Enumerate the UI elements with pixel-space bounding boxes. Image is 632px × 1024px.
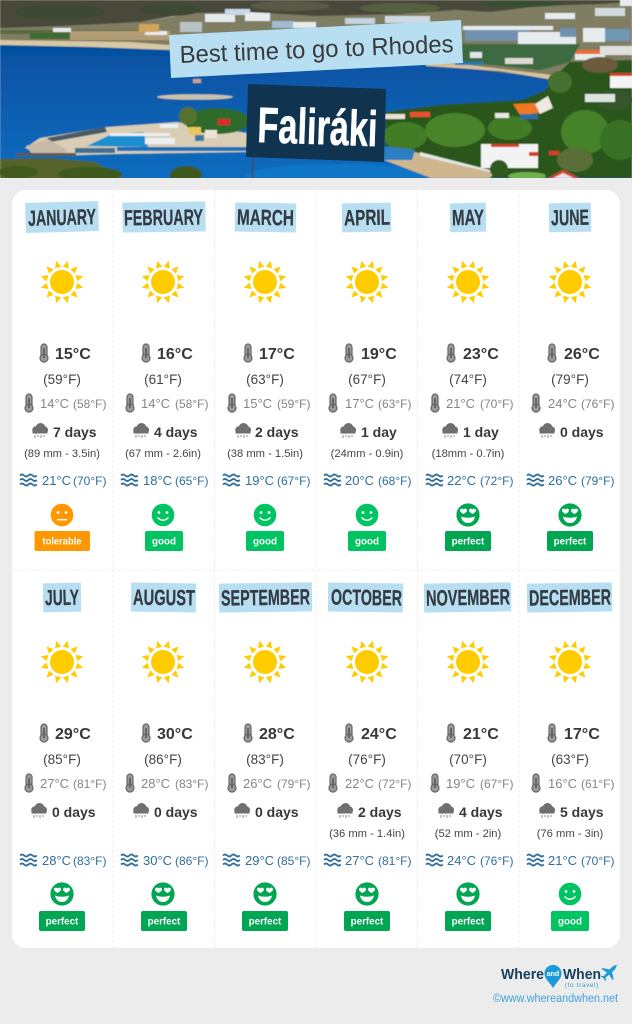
sea temperature: (72°F) (480, 474, 513, 488)
icon: sun (446, 640, 490, 684)
hillside (0, 0, 632, 28)
felt temperature (25, 394, 106, 412)
felt temperature: 14°C (141, 396, 170, 411)
rating label: perfect (249, 916, 282, 928)
rating label (551, 911, 589, 931)
felt temperature (228, 394, 310, 412)
rating label (445, 531, 491, 551)
felt temperature: 27°C (40, 776, 69, 791)
month: February (121, 201, 208, 551)
rating label: perfect (351, 916, 384, 928)
rainy days (442, 423, 499, 440)
temperature (142, 344, 193, 363)
sea temperature: 18°C (143, 473, 172, 488)
temperature (345, 724, 397, 743)
month title (131, 583, 196, 612)
temperature fahrenheit: (61°F) (144, 372, 182, 387)
temperature: 17°C (564, 726, 600, 743)
logo: Where and When: (to travel) (565, 983, 599, 989)
icon: sun (345, 260, 389, 304)
white beach building (481, 144, 538, 168)
sea temperature: (86°F) (175, 854, 208, 868)
felt temperature: 14°C (40, 396, 69, 411)
sea temperature (324, 473, 411, 488)
month title (43, 583, 81, 612)
rating label: perfect (452, 916, 485, 928)
sea temperature (426, 473, 513, 488)
sea temperature: 27°C (345, 853, 374, 868)
temperature (345, 344, 397, 363)
rating label: good (152, 536, 176, 548)
month title (122, 201, 206, 233)
panel: monthly calendar (12, 190, 620, 948)
sea temperature (20, 853, 106, 868)
rating label (547, 531, 593, 551)
month title: APRIL (344, 205, 390, 230)
felt temperature: (61°F) (581, 777, 614, 791)
temperature (40, 344, 91, 363)
temperature (244, 344, 295, 363)
felt temperature (431, 774, 513, 792)
sea temperature: 21°C (548, 853, 577, 868)
temperature (40, 724, 91, 743)
rating label (344, 911, 390, 931)
temperature fahrenheit: (63°F) (246, 372, 284, 387)
felt temperature (126, 394, 208, 412)
month title: MAY (452, 205, 484, 230)
sea temperature: 21°C (42, 473, 71, 488)
rating label: good (558, 916, 582, 928)
icon: sun (548, 260, 592, 304)
month: May (426, 203, 513, 551)
rating label (141, 911, 187, 931)
rainy days (133, 803, 198, 820)
lower beach (384, 152, 495, 178)
sea temperature: 22°C (447, 473, 476, 488)
felt temperature: (70°F) (480, 397, 513, 411)
rating label: perfect (554, 536, 587, 548)
felt temperature: (58°F) (73, 397, 106, 411)
temperature (548, 344, 600, 363)
sea temperature (121, 473, 208, 488)
temperature: 23°C (463, 346, 499, 363)
rainy days (337, 803, 402, 820)
rainfall: (18mm - 0.7in) (432, 448, 505, 460)
rainy days: 4 days (154, 424, 198, 440)
felt temperature: 26°C (243, 776, 272, 791)
rainfall: (38 mm - 1.5in) (227, 448, 303, 460)
rating label (145, 531, 183, 551)
month title: MARCH (237, 205, 294, 231)
sea temperature (324, 853, 411, 868)
left beach (0, 40, 170, 50)
rainy days: 5 days (560, 804, 604, 820)
rating label (34, 531, 90, 551)
rainy days: 4 days (459, 804, 503, 820)
month title: AUGUST (133, 585, 196, 610)
felt temperature: 21°C (446, 396, 475, 411)
harbour greenery (184, 108, 250, 134)
rainfall: (36 mm - 1.4in) (329, 828, 405, 840)
temperature (142, 724, 193, 743)
month title (25, 201, 99, 233)
rating face (456, 503, 480, 527)
header photo of Faliraki bay (0, 0, 632, 188)
rainy days: 2 days (358, 804, 402, 820)
sea temperature: 19°C (245, 473, 274, 488)
rainy days (31, 803, 96, 820)
icon: plane (601, 964, 618, 981)
icon: sun (40, 260, 84, 304)
rating face (355, 882, 379, 906)
sea temperature: 20°C (345, 473, 374, 488)
felt temperature: 28°C (141, 776, 170, 791)
temperature: 30°C (157, 726, 193, 743)
felt temperature: (59°F) (277, 397, 310, 411)
felt temperature: 19°C (446, 776, 475, 791)
rainy days (438, 803, 503, 820)
rating label: perfect (452, 536, 485, 548)
temperature (447, 724, 499, 743)
temperature: 21°C (463, 726, 499, 743)
sea temperature: (67°F) (277, 474, 310, 488)
small boat (193, 79, 201, 83)
banner: Best time to go to Rhodes (169, 20, 463, 78)
rating face (356, 504, 378, 526)
rainy days (32, 423, 97, 440)
month: June (527, 203, 614, 551)
rating label (445, 911, 491, 931)
felt temperature: (63°F) (378, 397, 411, 411)
sea temperature: 26°C (548, 473, 577, 488)
felt temperature: 16°C (548, 776, 577, 791)
temperature: 15°C (55, 346, 91, 363)
sea temperature: (70°F) (73, 474, 106, 488)
left tan fields (70, 31, 170, 40)
rating face (50, 882, 74, 906)
felt temperature (25, 774, 106, 792)
harbour (25, 122, 247, 156)
logo: Where and When (501, 964, 618, 989)
month title (219, 582, 312, 613)
sea temperature: (79°F) (581, 474, 614, 488)
town buildings (53, 0, 632, 60)
sea temperature (527, 473, 614, 488)
month title (424, 582, 511, 613)
rating face (253, 882, 277, 906)
rainy days: 0 days (154, 804, 198, 820)
felt temperature: (83°F) (175, 777, 208, 791)
sea temperature (121, 853, 208, 868)
rainfall: (76 mm - 3in) (537, 828, 604, 840)
rating face (559, 883, 581, 905)
rating face (152, 504, 174, 526)
logo: Where and When: and (547, 971, 559, 978)
temperature fahrenheit: (85°F) (43, 752, 81, 767)
temperature fahrenheit: (67°F) (348, 372, 386, 387)
rating label (348, 531, 386, 551)
rainy days: 2 days (255, 424, 299, 440)
felt temperature: (58°F) (175, 397, 208, 411)
icon: sun (40, 640, 84, 684)
felt temperature: 17°C (345, 396, 374, 411)
rating label (39, 911, 85, 931)
month: April (324, 203, 411, 551)
icon: sun (141, 260, 185, 304)
month: October (324, 582, 411, 931)
felt temperature: 15°C (243, 396, 272, 411)
temperature fahrenheit: (86°F) (144, 752, 182, 767)
temperature: 24°C (361, 726, 397, 743)
rainfall: (89 mm - 3.5in) (24, 448, 100, 460)
month: November (424, 582, 513, 931)
sea temperature: 30°C (143, 853, 172, 868)
bottom left hill (0, 158, 127, 180)
felt temperature: (67°F) (480, 777, 513, 791)
icon: sun (243, 260, 287, 304)
felt temperature (431, 394, 513, 412)
sea temperature: 28°C (42, 853, 71, 868)
temperature: 17°C (259, 346, 295, 363)
month title (549, 203, 591, 232)
felt temperature (532, 394, 614, 412)
month title (342, 203, 391, 232)
month title: FEBRUARY (124, 204, 203, 231)
greenery strip on the left shore (0, 30, 140, 34)
rating label (242, 911, 288, 931)
temperature: 28°C (259, 726, 295, 743)
month title: OCTOBER (331, 585, 402, 611)
rainy days: 1 day (361, 424, 397, 440)
felt temperature: (79°F) (277, 777, 310, 791)
month title: JANUARY (28, 204, 97, 231)
right beach (426, 63, 553, 80)
temperature (447, 344, 499, 363)
sea temperature (20, 473, 106, 488)
banner: Faliraki: Faliráki (257, 97, 378, 157)
houses on the headland (410, 112, 430, 117)
rating label: tolerable (42, 536, 82, 548)
rainfall: (24mm - 0.9in) (331, 448, 404, 460)
rainy days (133, 423, 198, 440)
month title (328, 582, 403, 613)
month title: JUNE (551, 205, 589, 230)
sea temperature (223, 853, 310, 868)
rainy days: 7 days (53, 424, 97, 440)
sea temperature: 29°C (245, 853, 274, 868)
felt temperature: (76°F) (581, 397, 614, 411)
rainy days (539, 423, 604, 440)
month: August (121, 583, 208, 931)
month: January (20, 201, 106, 551)
month: December (527, 582, 614, 931)
icon: sun (446, 260, 490, 304)
sea temperature: (68°F) (378, 474, 411, 488)
sea temperature (426, 853, 513, 868)
rainfall: (52 mm - 2in) (435, 828, 502, 840)
rating face (558, 503, 582, 527)
island (157, 94, 233, 100)
month: September (219, 582, 312, 931)
sea temperature: (83°F) (73, 854, 106, 868)
felt temperature: (72°F) (378, 777, 411, 791)
icon: sun (243, 640, 287, 684)
month: March (223, 202, 310, 551)
icon: sun (345, 640, 389, 684)
temperature fahrenheit: (63°F) (551, 752, 589, 767)
rating face (51, 504, 73, 526)
sea temperature: 24°C (447, 853, 476, 868)
rating face (456, 882, 480, 906)
rating label: good (355, 536, 379, 548)
icon: map pin (544, 965, 562, 988)
rating label (246, 531, 284, 551)
rainy days (539, 803, 604, 820)
rainy days (234, 803, 299, 820)
sea temperature (223, 473, 310, 488)
icon: sun (141, 640, 185, 684)
sea temperature: (65°F) (175, 474, 208, 488)
website credit: ©www.whereandwhen.net (493, 993, 619, 1005)
banner: Best time to go to Rhodes: Best time to go to Rhodes (179, 31, 454, 69)
temperature: 26°C (564, 346, 600, 363)
sea temperature: (81°F) (378, 854, 411, 868)
right green headland (385, 60, 632, 178)
month title (235, 202, 296, 233)
rainy days (340, 423, 397, 440)
rating face (254, 504, 276, 526)
sea temperature: (76°F) (480, 854, 513, 868)
temperature fahrenheit: (59°F) (43, 372, 81, 387)
temperature (548, 724, 600, 743)
logo: Where and When: Where (501, 966, 544, 983)
rating face (151, 882, 175, 906)
felt temperature (532, 774, 614, 792)
month title (450, 203, 486, 232)
temperature fahrenheit: (74°F) (449, 372, 487, 387)
sea temperature: (70°F) (581, 854, 614, 868)
rainy days: 1 day (463, 424, 499, 440)
rating label: perfect (148, 916, 181, 928)
rating label: perfect (46, 916, 79, 928)
sea temperature (527, 853, 614, 868)
felt temperature (329, 394, 411, 412)
rainy days: 0 days (52, 804, 96, 820)
felt temperature: 24°C (548, 396, 577, 411)
felt temperature (126, 774, 208, 792)
felt temperature (228, 774, 310, 792)
temperature fahrenheit: (83°F) (246, 752, 284, 767)
rainy days: 0 days (560, 424, 604, 440)
land band behind the left beach (0, 0, 632, 80)
trees behind right beach (462, 44, 580, 70)
felt temperature: 22°C (345, 776, 374, 791)
temperature fahrenheit: (70°F) (449, 752, 487, 767)
sea (0, 44, 632, 180)
sea temperature: (85°F) (277, 854, 310, 868)
rainy days (235, 423, 299, 440)
logo: Where and When: When (563, 966, 601, 983)
rainfall: (67 mm - 2.6in) (125, 448, 201, 460)
icon: sun (548, 640, 592, 684)
felt temperature (329, 774, 411, 792)
month: July (20, 583, 106, 931)
rating label: good (253, 536, 277, 548)
temperature fahrenheit: (79°F) (551, 372, 589, 387)
banner: Faliraki (246, 84, 386, 162)
temperature fahrenheit: (76°F) (348, 752, 386, 767)
month title: JULY (45, 585, 79, 610)
month title: SEPTEMBER (221, 584, 310, 611)
month title: NOVEMBER (426, 584, 510, 611)
felt temperature: (81°F) (73, 777, 106, 791)
temperature: 29°C (55, 726, 91, 743)
temperature (244, 724, 295, 743)
rainy days: 0 days (255, 804, 299, 820)
temperature: 19°C (361, 346, 397, 363)
temperature: 16°C (157, 346, 193, 363)
